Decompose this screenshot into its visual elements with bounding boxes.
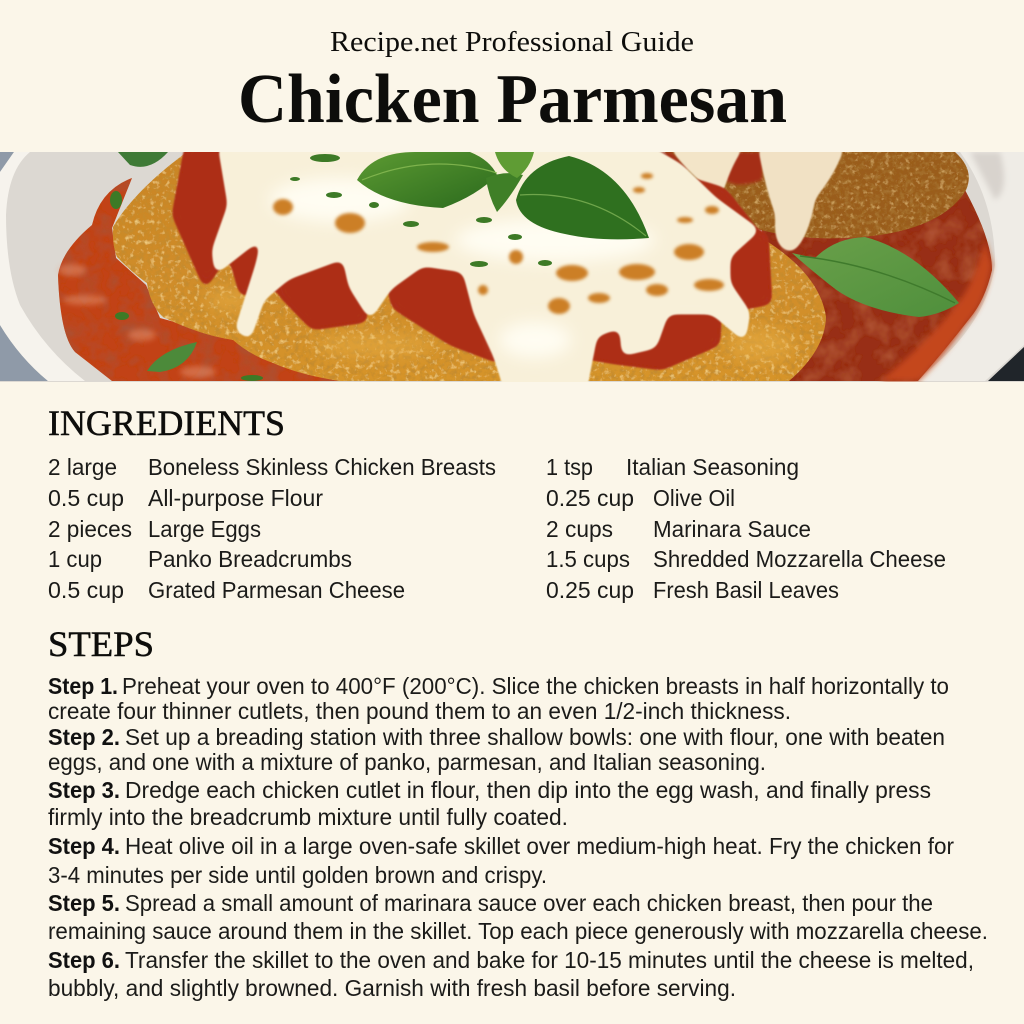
ingredients list: left column: 0.5 cup: [48, 485, 124, 511]
ingredients list: right column: 0.25 cup: [546, 485, 634, 511]
cheese highlights: [270, 178, 655, 358]
step 6: Step 6.: [48, 947, 120, 973]
step 1: Step 1.: [48, 673, 118, 699]
step 5: Spread a small amount of marinara sauce over each chicken breast, then pour the: [125, 890, 933, 916]
hero photo: chicken parmesan on a plate: [0, 152, 1024, 382]
step 3: Dredge each chicken cutlet in flour, then dip into the egg wash, and finally press: [125, 777, 931, 803]
ingredients list: right column: 2 cups: [546, 516, 613, 542]
ingredients list: left column: Boneless Skinless Chicken Breasts: [148, 454, 496, 480]
ingredients list: left column: Grated Parmesan Cheese: [148, 577, 405, 603]
subtitle: Recipe.net Professional Guide: [330, 27, 694, 58]
crust highlights: [206, 288, 794, 363]
step 3: firmly into the breadcrumb mixture until fully coated.: [48, 804, 568, 830]
step 6: Transfer the skillet to the oven and bake for 10-15 minutes until the cheese is melted,: [125, 947, 974, 973]
step 1: create four thinner cutlets, then pound them to an even 1/2-inch thickness.: [48, 698, 791, 724]
step 2: eggs, and one with a mixture of panko, parmesan, and Italian seasoning.: [48, 749, 766, 775]
step 5: [48, 890, 988, 944]
plate rim left: [0, 152, 85, 381]
table corners: [0, 152, 14, 172]
ingredients list: left column: [48, 454, 496, 603]
basil leaf on right sauce: [792, 237, 959, 317]
step 4: [48, 833, 954, 888]
step 2: Set up a breading station with three shallow bowls: one with flour, one with beaten: [125, 724, 945, 750]
title: Chicken Parmesan: [238, 61, 787, 138]
ingredients list: left column: 2 large: [48, 454, 117, 480]
front chicken cutlet: [113, 152, 826, 381]
marinara sauce pool, left: [58, 178, 340, 381]
tomato sauce under cheese: [172, 145, 772, 370]
basil leaf on left sauce: [147, 342, 197, 372]
ingredients list: right column: Shredded Mozzarella Cheese: [653, 546, 946, 572]
back chicken cutlet: [665, 152, 969, 238]
ingredients list: right column: Marinara Sauce: [653, 516, 811, 542]
step 1: [48, 673, 949, 724]
sauce on back cutlet: [625, 152, 690, 170]
ingredients list: left column: All-purpose Flour: [148, 485, 323, 511]
ingredients list: left column: 0.5 cup: [48, 577, 124, 603]
ingredients list: right column: 1 tsp: [546, 454, 593, 480]
browned cheese spots: [273, 173, 724, 314]
ingredients list: right column: 1.5 cups: [546, 546, 630, 572]
heading: steps: STEPS: [48, 624, 154, 664]
back cheese drips: [668, 145, 745, 195]
ingredients list: right column: Fresh Basil Leaves: [653, 577, 839, 603]
step 5: remaining sauce around them in the skillet. Top each piece generously with mozzarella cheese.: [48, 918, 988, 944]
step 4: Heat olive oil in a large oven-safe skillet over medium-high heat. Fry the chicken for: [125, 833, 954, 859]
basil garnish on cheese: [357, 152, 649, 239]
ingredients list: left column: 1 cup: [48, 546, 102, 572]
step 3: Step 3.: [48, 777, 120, 803]
step 4: 3-4 minutes per side until golden brown and crispy.: [48, 862, 547, 888]
ingredients list: right column: Olive Oil: [653, 485, 735, 511]
heading: ingredients: INGREDIENTS: [48, 403, 285, 443]
ingredients list: right column: Italian Seasoning: [626, 454, 799, 480]
step 6: [48, 947, 974, 1001]
recipe content: [48, 403, 988, 1001]
ingredients list: right column: 0.25 cup: [546, 577, 634, 603]
ingredients list: left column: Panko Breadcrumbs: [148, 546, 352, 572]
step 1: Preheat your oven to 400°F (200°C). Slice the chicken breasts in half horizontally to: [122, 673, 949, 699]
ingredients list: left column: Large Eggs: [148, 516, 261, 542]
step 3: [48, 777, 931, 830]
step 2: [48, 724, 945, 775]
plate rim right: [915, 152, 1024, 381]
step 2: Step 2.: [48, 724, 120, 750]
plate background: [0, 152, 1024, 382]
step 4: Step 4.: [48, 833, 120, 859]
herb flecks: [110, 154, 552, 381]
melted mozzarella: [212, 145, 760, 392]
sauce highlights: [58, 264, 216, 378]
marinara sauce pool, right: [760, 190, 992, 381]
basil leaf top left: [118, 152, 168, 167]
step 6: bubbly, and slightly browned. Garnish with fresh basil before serving.: [48, 975, 736, 1001]
header: guide title block: [238, 27, 787, 138]
step 5: Step 5.: [48, 890, 120, 916]
ingredients list: left column: 2 pieces: [48, 516, 132, 542]
ingredients list: right column: [546, 454, 946, 603]
